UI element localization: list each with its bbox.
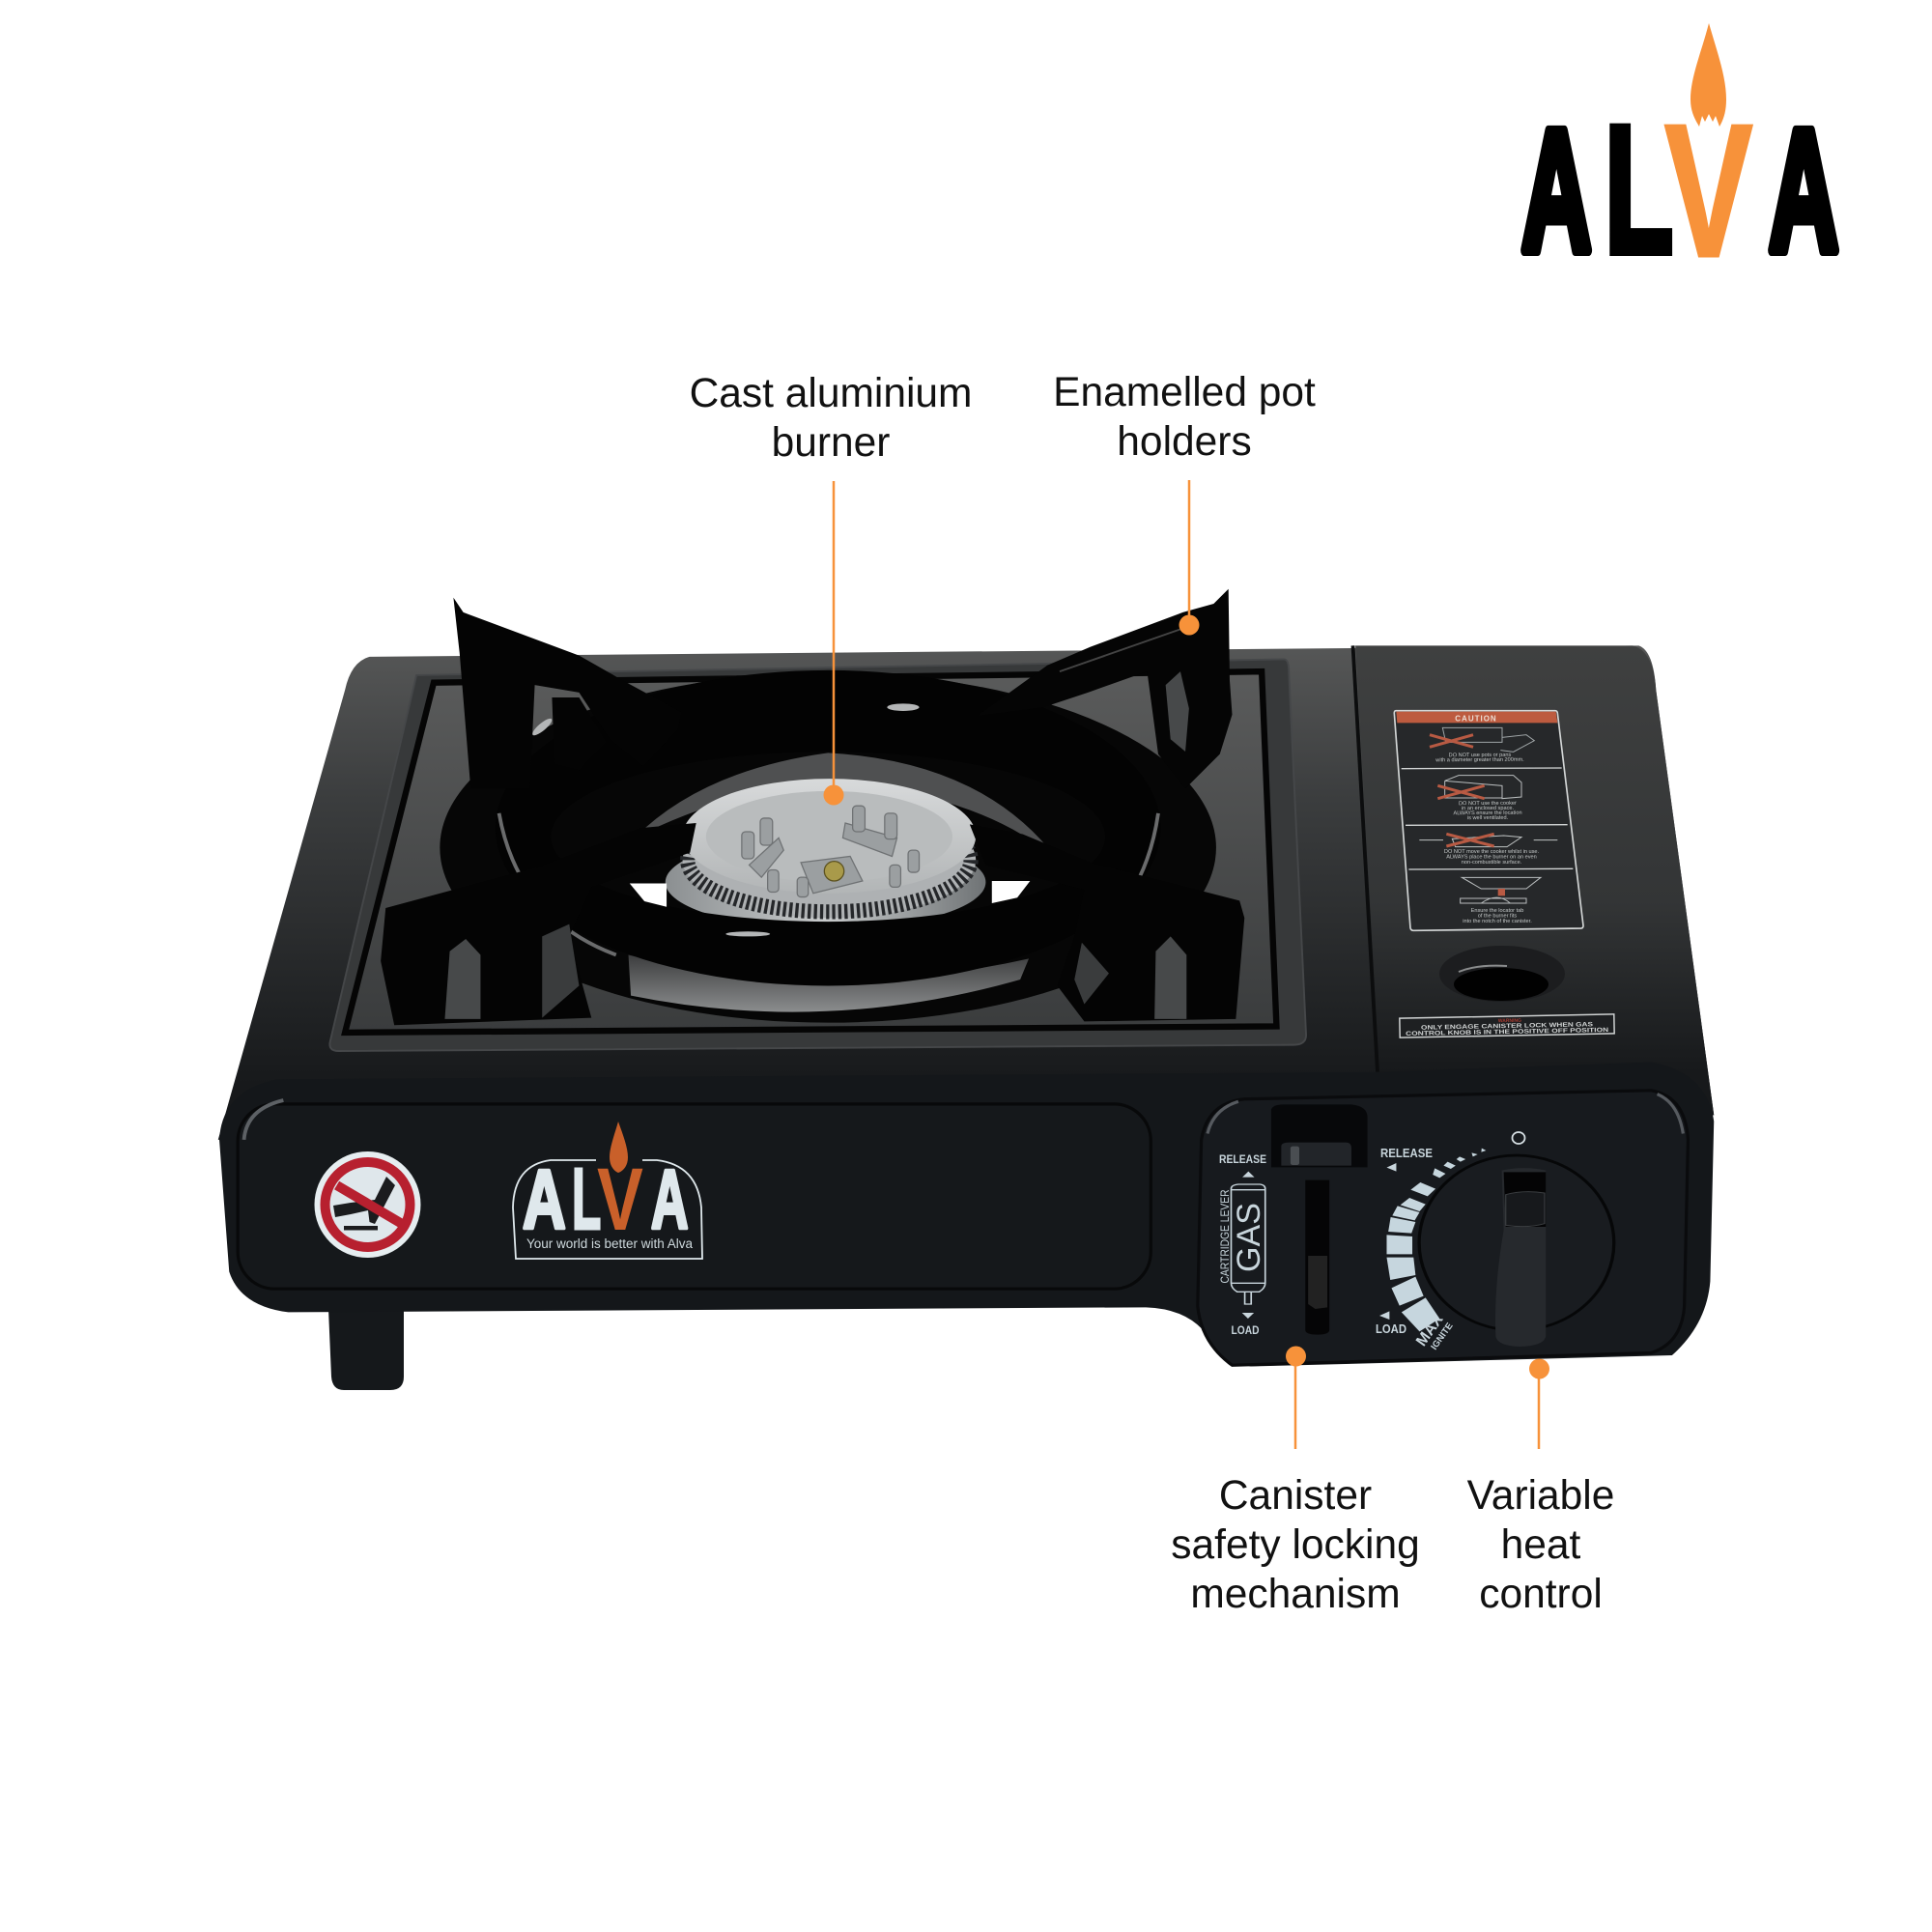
label: variable heat control: control: [1479, 1572, 1603, 1617]
pot holder: front left: [381, 823, 696, 1025]
cartridge lever and heat dial: [1218, 1104, 1614, 1352]
lever recess: [1271, 1104, 1368, 1167]
ring reflection: [635, 753, 1060, 863]
text: cartridge lever: CARTRIDGE LEVER: [1218, 1189, 1232, 1283]
warning word: WARNING: [1498, 1018, 1521, 1024]
label: cast aluminium burner: burner: [772, 420, 890, 466]
row 3 drawing: [1419, 836, 1557, 847]
hot surface: [344, 1226, 378, 1231]
label: variable heat control: heat: [1501, 1522, 1581, 1568]
heat dial handle: [1495, 1168, 1546, 1347]
row 1 cross: [1430, 735, 1473, 747]
badge letter A: A: [523, 1152, 566, 1245]
bowl reflection: [629, 955, 1029, 1012]
text: max: MAX: [1413, 1312, 1447, 1350]
burner toothed ring: [683, 802, 976, 918]
callout: canister lock: [1286, 1347, 1306, 1449]
caution text: row 4: into the notch of the canister.: [1463, 919, 1532, 924]
canister release hole: [1454, 968, 1548, 1001]
caution sticker: [1394, 711, 1583, 930]
text: gas: GAS: [1231, 1203, 1267, 1272]
burner base: [666, 836, 985, 929]
caution text: row 1: with a diameter greater than 200mm.: [1435, 757, 1524, 763]
burner ports: [742, 806, 920, 897]
row 4 drawing: [1461, 877, 1541, 903]
text: ignite: IGNITE: [1429, 1321, 1456, 1352]
product: portable gas stove: [218, 589, 1714, 1390]
stove front face: [219, 1062, 1714, 1367]
logo letter L: L: [1605, 89, 1673, 292]
prohibition slash: [337, 1185, 404, 1225]
label: variable heat control: Variable: [1467, 1473, 1614, 1519]
right control-side panel: [1355, 645, 1714, 1115]
caution text: row 4: of the burner fits: [1478, 914, 1517, 920]
tray floor: [345, 671, 1276, 1033]
front badge: Alva logo: [513, 1122, 702, 1259]
badge letter A: A: [651, 1153, 689, 1246]
front face recessed panel: [238, 1104, 1151, 1289]
off marker: [1513, 1132, 1524, 1144]
row 4 marker: [1498, 889, 1505, 895]
logo letter A: A: [1769, 94, 1838, 287]
stove foot: [328, 1309, 404, 1390]
badge tagline: Your world is better with Alva: [526, 1236, 693, 1252]
hand: [333, 1177, 395, 1224]
sticker outline: [1394, 711, 1583, 930]
caution text: row 2: in an enclosed space.: [1462, 806, 1514, 811]
heat scale segments: [1386, 1149, 1486, 1331]
row 2 cross: [1437, 785, 1485, 799]
label: cast aluminium burner: Cast aluminium: [690, 371, 972, 416]
label: enamelled pot holders: holders: [1117, 419, 1252, 465]
badge outline: [513, 1160, 702, 1259]
label: canister safety locking mechanism: Canister: [1219, 1473, 1372, 1519]
burner top disc: [683, 779, 976, 894]
row 2 drawing: [1445, 776, 1521, 799]
sticker row dividers: [1402, 768, 1573, 869]
pot holder: back left: [453, 598, 681, 788]
no-touch warning icon: [315, 1151, 421, 1258]
cartridge drawing: [1231, 1184, 1265, 1304]
burner: cast aluminium: [666, 779, 985, 929]
logo: ALVA with flame: [1521, 23, 1838, 297]
caution text: row 3: non-combustible surface.: [1462, 860, 1522, 866]
callout: burner: [823, 481, 844, 806]
pan support ring: [496, 670, 1161, 985]
heat dial knob: [1419, 1155, 1614, 1330]
label: canister safety locking mechanism: mechanism: [1190, 1572, 1401, 1617]
warning line 2: CONTROL KNOB IS IN THE POSITIVE OFF POSITION: [1406, 1027, 1609, 1037]
caution heading: CAUTION: [1455, 715, 1497, 723]
label: enamelled pot holders: Enamelled pot: [1053, 370, 1316, 415]
handle recess: [1504, 1172, 1546, 1227]
caution text: row 2: is well ventilated.: [1467, 815, 1509, 821]
badge letter L: L: [572, 1151, 601, 1248]
burner recessed face: [706, 791, 952, 882]
text: load, lever: LOAD: [1231, 1323, 1260, 1337]
control panel recess: [1198, 1091, 1688, 1365]
logo letter A: A: [1521, 94, 1591, 287]
stove top face: [218, 645, 1714, 1140]
burner jet: [824, 862, 844, 881]
caution text: row 3: ALWAYS place the burner on an even: [1446, 854, 1537, 860]
row 1 drawing: [1442, 727, 1534, 752]
caution text: row 3: DO NOT move the cooker whilst in use.: [1444, 849, 1540, 855]
lever handle: [1281, 1143, 1351, 1166]
caution text: row 4: Ensure the locator tab: [1471, 908, 1523, 914]
pot holder: back right: [977, 589, 1233, 788]
tray rim: [329, 659, 1306, 1051]
text: release, lever: RELEASE: [1219, 1154, 1266, 1166]
prohibition ring: [325, 1162, 410, 1247]
badge letter V: V: [597, 1150, 643, 1249]
warning line 1: ONLY ENGAGE CANISTER LOCK WHEN GAS: [1421, 1021, 1594, 1032]
caution text: row 1: DO NOT use pots or pans: [1449, 753, 1511, 758]
text: load, dial: LOAD: [1376, 1322, 1406, 1336]
caution text: row 2: DO NOT use the cooker: [1459, 801, 1517, 807]
callout: heat control: [1529, 1358, 1549, 1449]
text: release, dial: RELEASE: [1380, 1147, 1433, 1160]
logo letter V: V: [1664, 85, 1753, 297]
burner bowl: [440, 672, 1216, 1023]
lever arrows: [1242, 1163, 1396, 1320]
ring highlights: [530, 703, 920, 936]
badge flame: [610, 1122, 628, 1173]
canister release recess: [1439, 946, 1565, 1002]
label: canister safety locking mechanism: safety locking: [1171, 1522, 1420, 1568]
lever slot: [1305, 1180, 1329, 1335]
sticker header: [1396, 712, 1557, 723]
callout: pot holders: [1179, 480, 1200, 636]
see-through gaps beside burner: [630, 881, 1030, 907]
logo flame: [1690, 23, 1726, 127]
pot holder: front right: [970, 824, 1244, 1021]
warning sticker: [1400, 1014, 1614, 1037]
row 3 cross: [1446, 834, 1494, 846]
caution text: row 2: ALWAYS ensure the location: [1453, 810, 1522, 816]
